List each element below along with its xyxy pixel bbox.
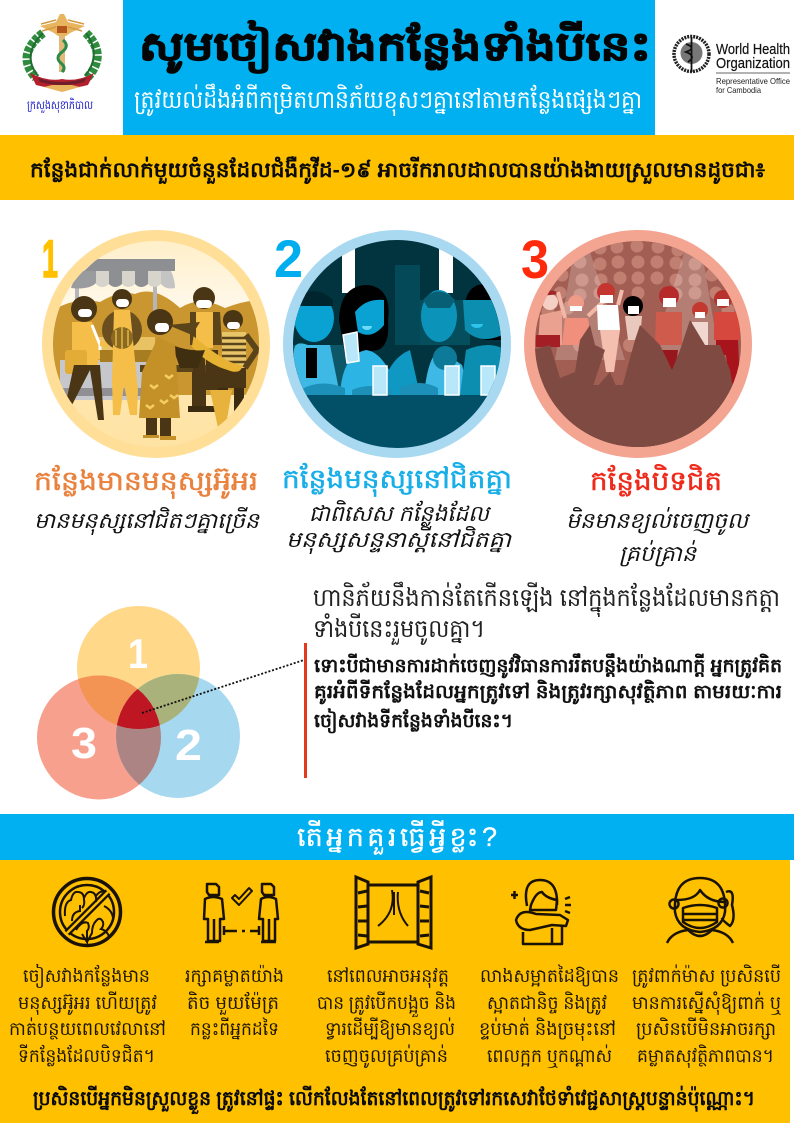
caption: crowded places [34,464,261,535]
diner woman [339,285,389,395]
tip 3 text [317,965,456,1068]
tip 4 text: លាងសម្អាតដៃឱ្យបាន [480,964,619,987]
woman left [65,296,110,420]
number 3: 3 [521,230,549,290]
tip 5 text: ប្រសិនបើមិនអាចរក្សា [636,1017,776,1040]
logo: Ministry of Health emblem [27,14,97,113]
tip 3 text: ចេញចូលគ្រប់គ្រាន់ [325,1044,448,1068]
woman center [139,309,180,440]
icon: no crowds [54,878,120,946]
number 2: 2 [274,230,303,289]
section heading band: តើអ្នកគួរធ្វើអ្វីខ្លះ? [297,820,497,855]
tip 4 text: ស្អាតជានិច្ច និងត្រូវ [487,991,607,1015]
venn diagram: 3 [71,719,97,768]
vendor right [188,287,222,412]
tip 2 text: រក្សាគម្លាតយ៉ាង [185,964,284,987]
caption: crowded places: មានមនុស្សនៅជិតៗគ្នាច្រើន [34,507,261,535]
red rule [304,643,307,778]
intro banner: កន្លែងជាក់លាក់មួយចំនួនដែលជំងឺកូវីដ-១៩ អាចរីករាលដាលបានយ៉ាងងាយស្រួលមានដូចជា៖ [30,156,766,185]
risk statement [313,581,780,645]
illustration: crowded market [42,230,270,458]
tip 5 text: គម្លាតសុវត្ថិភាពបាន។ [637,1044,774,1068]
table [140,365,230,372]
illustration: people in close contact [283,230,511,458]
subtitle: ត្រូវយល់ដឹងអំពីកម្រិតហានិភ័យខុសៗគ្នានៅតាមកន្លែងផ្សេងៗគ្នា [134,83,642,116]
diner center hidden [388,350,418,395]
icon: cough into elbow [511,880,571,944]
tip 1 text [9,963,166,1067]
header title panel [123,0,655,135]
tip 2 text: កន្លះពីអ្នកដទៃ [190,1017,279,1040]
tip 3 text: នៅពេលអាចអនុវត្ត [327,965,449,988]
illustration: closed dance crowd [524,230,752,458]
man with melon [102,289,142,415]
crowd silhouette [535,320,732,447]
venn diagram: 1 [128,630,148,677]
advice paragraph [314,653,782,734]
boy striped [210,310,257,428]
tip 4 text: ខ្ទប់មាត់ និងច្រមុះនៅ [479,1017,616,1041]
section heading band [0,814,794,860]
caption: close-contact settings: មនុស្សសន្ទនាស្តីនៅជិតគ្នា [286,526,512,554]
tip 1 text: ទីកន្លែងដែលបិទជិត។ [18,1044,155,1067]
caption: crowded places: កន្លែងមានមនុស្សអ៊ូអរ [34,464,258,499]
awning [71,259,175,288]
number 1: 1 [42,230,58,289]
logo: World Health Organization [674,36,790,95]
caption: confined spaces: កន្លែងបិទជិត [590,464,722,497]
panel: what to do [0,860,790,1123]
venn diagram [37,606,240,800]
icon: wearing a mask [667,878,734,943]
tip 2 text [185,964,284,1040]
caption: confined spaces: មិនមានខ្យល់ចេញចូល [566,507,751,535]
intro banner [0,135,794,200]
tip 1 text: មនុស្សអ៊ូអរ ហើយត្រូវ [18,991,157,1015]
tip 4 text: ពេលក្អក ឬកណ្តាស់ [487,1044,612,1068]
dancers [536,283,740,385]
diner left [292,291,340,395]
tip 1 text: កាត់បន្ថយពេលវេលានៅ [9,1017,166,1040]
caption: close-contact settings: កន្លែងមនុស្សនៅជិតគ្នា [282,462,512,497]
risk statement: ទាំងបីនេះរួមចូលគ្នា។ [313,613,485,645]
main title: សូមចៀសវាងកន្លែងទាំងបីនេះ [139,20,651,74]
caption: close-contact settings: ជាពិសេស កន្លែងដែល [309,500,492,527]
caption: confined spaces [566,464,751,567]
diner right [460,284,505,395]
tip 5 text: មានការស្នើសុំឱ្យពាក់ ឬ [632,991,781,1015]
tip 2 text: តិច មួយម៉ែត្រ [187,991,279,1015]
tip 4 text [479,964,619,1068]
advice paragraph: ទោះបីជាមានការដាក់ចេញនូវវិធានការរឹតបន្តឹងយ៉ាងណាក្តី អ្នកត្រូវគិត [314,653,782,679]
advice paragraph: គូរអំពីទីកន្លែងដែលអ្នកត្រូវទៅ និងត្រូវរក្សាសុវត្ថិភាព តាមរយៈការ [314,679,782,705]
caption: close-contact settings [282,462,512,554]
caption: confined spaces: គ្រប់គ្រាន់ [619,540,698,567]
logo: World Health Organization: for Cambodia [716,85,761,95]
dotted leader line [142,660,304,713]
advice paragraph: ចៀសវាងទីកន្លែងទាំងបីនេះ។ [314,708,513,734]
tip 5 text: ត្រូវពាក់ម៉ាស ប្រសិនបើ [632,964,781,988]
tip 3 text: ទ្វារដើម្បីឱ្យមានខ្យល់ [325,1017,455,1040]
icon: open window [356,877,431,948]
ministry name: ក្រសួងសុខាភិបាល [27,97,93,113]
venn centre [117,689,160,729]
stay-home note: ប្រសិនបើអ្នកមិនស្រួលខ្លួន ត្រូវនៅផ្ទះ លើកលែងតែនៅពេលត្រូវទៅរកសេវាថែទាំវេជ្ជសាស្ត្របន្ទាន់ប៉ុណ្ណោះ។ [33,1085,755,1115]
tip 3 text: បាន ត្រូវបើកបង្អួច និង [317,991,456,1018]
tip 1 text: ចៀសវាងកន្លែងមាន [23,963,150,988]
diner man [421,290,464,395]
corn basket [194,340,240,370]
glasses [343,332,495,395]
tip 5 text [632,964,781,1068]
icon: keep distance [204,884,278,942]
venn diagram: 2 [175,721,202,770]
